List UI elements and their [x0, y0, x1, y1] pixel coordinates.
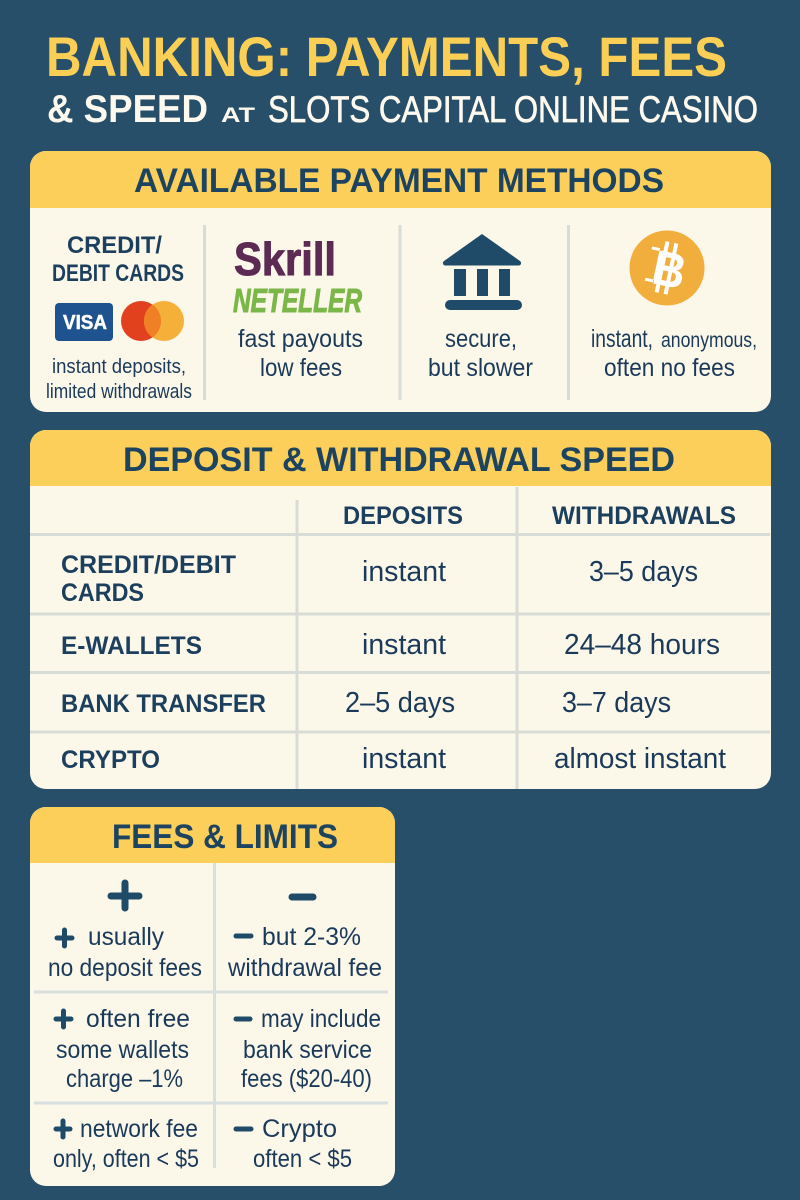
row: crypto con: often < $5 [253, 1145, 352, 1173]
row: credit and debit cards: CREDIT/DEBIT [61, 551, 236, 579]
row: crypto con [236, 1115, 352, 1173]
heading: deposit and withdrawal speed: DEPOSIT & WITHDRAWAL SPEED [123, 441, 675, 479]
icon: large minus [292, 894, 313, 900]
row: credit and debit cards [61, 551, 698, 607]
icon: visa card [55, 303, 113, 341]
row: e-wallets [61, 629, 720, 661]
row: bank transfer [61, 687, 671, 719]
row: bank transfer: BANK TRANSFER [61, 690, 266, 718]
row: withdrawal fee con [227, 923, 382, 982]
heading: available payment methods: AVAILABLE PAYMENT METHODS [134, 162, 664, 200]
row: deposit fees pro: usually [88, 923, 164, 951]
table header [343, 502, 736, 530]
row: deposit fees pro [48, 923, 202, 982]
row: deposit fees pro: no deposit fees [48, 954, 202, 982]
panel: available payment methods [30, 151, 771, 412]
method: crypto [591, 230, 757, 382]
row: credit and debit cards: instant [362, 556, 446, 588]
panel: deposit and withdrawal speed [30, 430, 771, 789]
method: credit and debit cards: instant deposits, [52, 356, 186, 378]
method: bank transfer: secure, [445, 325, 517, 353]
row: crypto [61, 743, 726, 775]
icon: mastercard [121, 301, 184, 341]
row: credit and debit cards: CARDS [61, 579, 144, 607]
icon: bitcoin [630, 230, 704, 306]
row: crypto pro: only, often < $5 [53, 1145, 199, 1173]
row: bank transfer: 2–5 days [345, 687, 455, 719]
method: e-wallets: Skrill [234, 233, 336, 285]
row: withdrawal fee con: but 2-3% [262, 923, 361, 951]
method: crypto: anonymous, [661, 329, 757, 352]
row: wallets pro: some wallets [56, 1036, 189, 1064]
row: wallets pro: often free [86, 1005, 190, 1033]
method: bank transfer: but slower [428, 354, 533, 382]
method: crypto: often no fees [604, 354, 735, 382]
method: e-wallets [233, 233, 363, 382]
row: bank fees con: fees ($20-40) [241, 1065, 372, 1093]
row: e-wallets: E-WALLETS [61, 632, 202, 660]
icon: bitcoin: B [648, 241, 691, 300]
title: AT [221, 104, 255, 127]
method: e-wallets: fast payouts [238, 325, 363, 353]
method: e-wallets: NETELLER [233, 282, 362, 319]
row: e-wallets: 24–48 hours [564, 629, 720, 661]
row: crypto pro [53, 1115, 199, 1173]
method: bank transfer [428, 234, 533, 382]
row: withdrawal fee con: withdrawal fee [227, 954, 382, 982]
method: e-wallets: low fees [260, 354, 342, 382]
row: crypto pro: network fee [80, 1115, 198, 1143]
row: credit and debit cards: 3–5 days [589, 556, 698, 588]
table header: DEPOSITS [343, 502, 463, 530]
row: wallets pro: charge –1% [66, 1065, 183, 1093]
method: credit and debit cards: limited withdrawals [46, 381, 192, 403]
icon: large plus [111, 883, 139, 908]
row: e-wallets: instant [362, 629, 446, 661]
row: crypto: instant [362, 743, 446, 775]
method: credit and debit cards: DEBIT CARDS [52, 260, 184, 287]
row: wallets pro [56, 1005, 190, 1093]
row: crypto con: Crypto [262, 1115, 337, 1143]
method: crypto: instant, [591, 325, 653, 353]
row: bank fees con [236, 1005, 381, 1093]
heading: fees and limits: FEES & LIMITS [112, 818, 338, 856]
icon: visa card: VISA [63, 312, 107, 334]
icon: bank [443, 234, 522, 310]
row: crypto: almost instant [554, 743, 726, 775]
title: & SPEED [47, 88, 208, 131]
panel: fees and limits [30, 807, 395, 1186]
row: bank transfer: 3–7 days [562, 687, 671, 719]
title: BANKING: PAYMENTS, FEES [46, 25, 727, 88]
method: credit and debit cards: CREDIT/ [67, 232, 162, 259]
method: credit and debit cards [46, 232, 192, 403]
title [46, 25, 758, 131]
row: bank fees con: may include [261, 1005, 381, 1033]
row: bank fees con: bank service [243, 1036, 372, 1064]
table header: WITHDRAWALS [552, 502, 736, 530]
row: crypto: CRYPTO [61, 746, 160, 774]
